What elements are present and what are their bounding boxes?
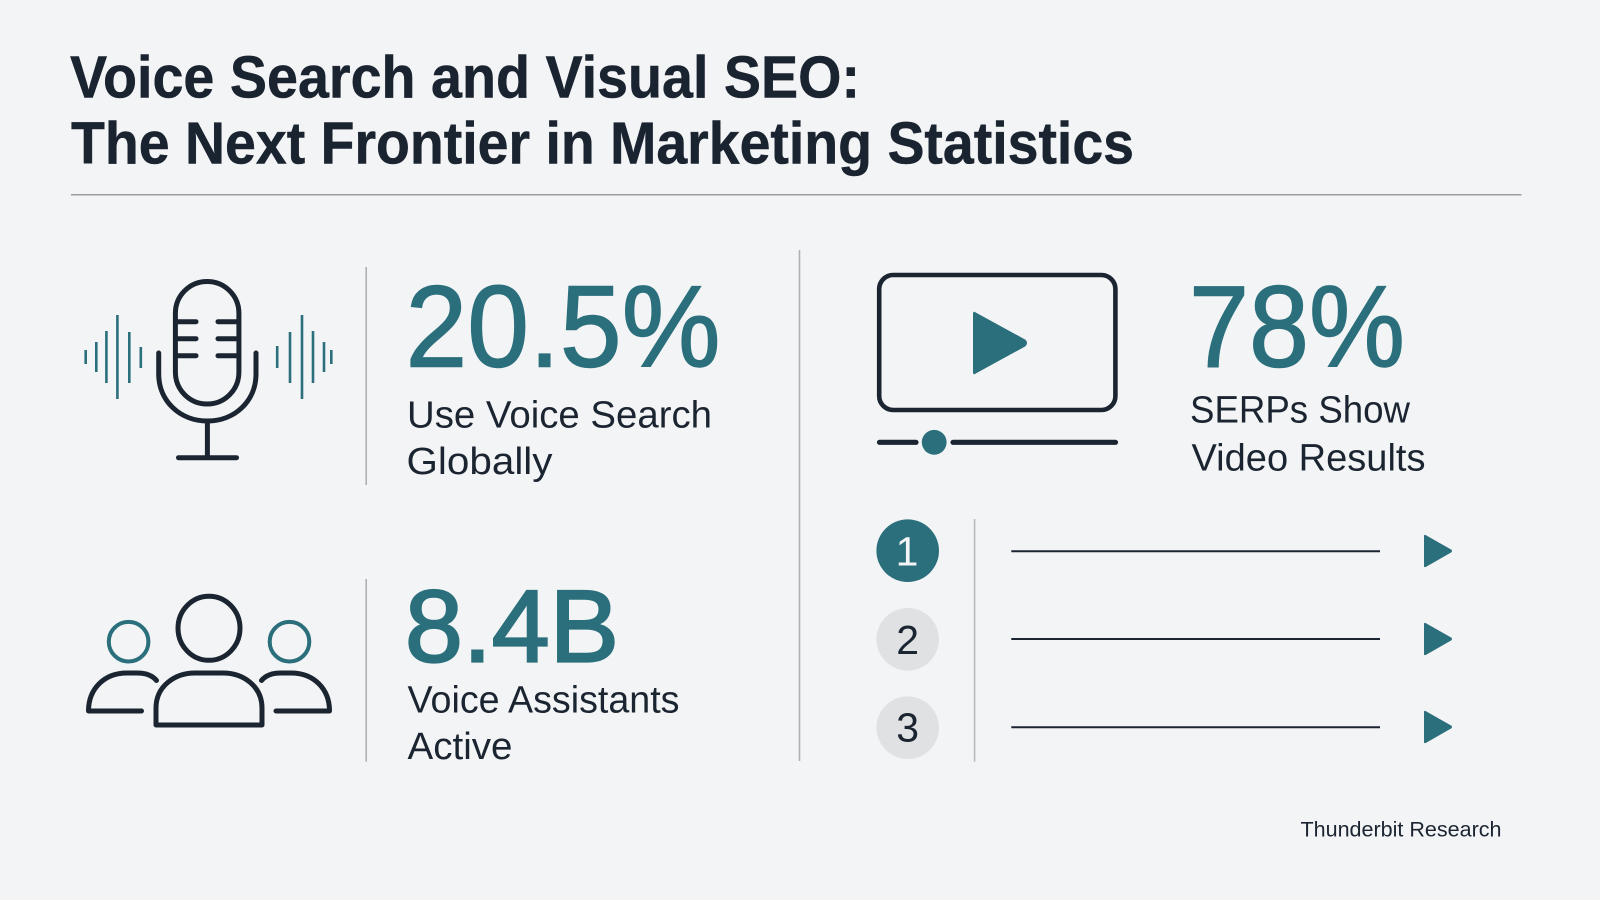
rank 3 row [876,696,1452,759]
panel: voice search statistic [86,262,720,485]
label: voice assistants active: Voice Assistants [408,680,680,722]
label: serps show video results: SERPs Show [1190,390,1411,432]
title: The Next Frontier in Marketing Statistics [71,110,1134,176]
label: voice assistants active: Active [408,726,512,768]
title [70,44,1134,176]
source credit: Thunderbit Research [1300,819,1502,842]
label: use voice search globally: Use Voice Search [407,394,712,436]
icon: microphone with sound waves [86,282,331,458]
statistic: 20.5%: 20.5% [406,262,720,392]
label: serps show video results: Video Results [1192,438,1426,480]
title: Voice Search and Visual SEO: [70,44,860,110]
panel: ranked results list [876,519,1452,762]
label: voice assistants active [408,680,680,768]
label: serps show video results [1190,390,1426,480]
statistic: 8.4B: 8.4B [405,570,619,684]
rank 1 row [876,519,1452,582]
panel: voice assistants statistic [88,570,680,768]
rank 3 row: 3 [896,705,919,751]
icon: video player [879,275,1116,455]
label: use voice search globally [406,394,712,483]
rank 2 row [876,608,1452,671]
rank 1 row: 1 [896,529,918,575]
panel: video results statistic [879,262,1426,480]
statistic: 78%: 78% [1189,262,1405,392]
icon: group of three people [88,596,330,725]
label: use voice search globally: Globally [406,441,552,483]
rank 2 row: 2 [896,617,919,663]
